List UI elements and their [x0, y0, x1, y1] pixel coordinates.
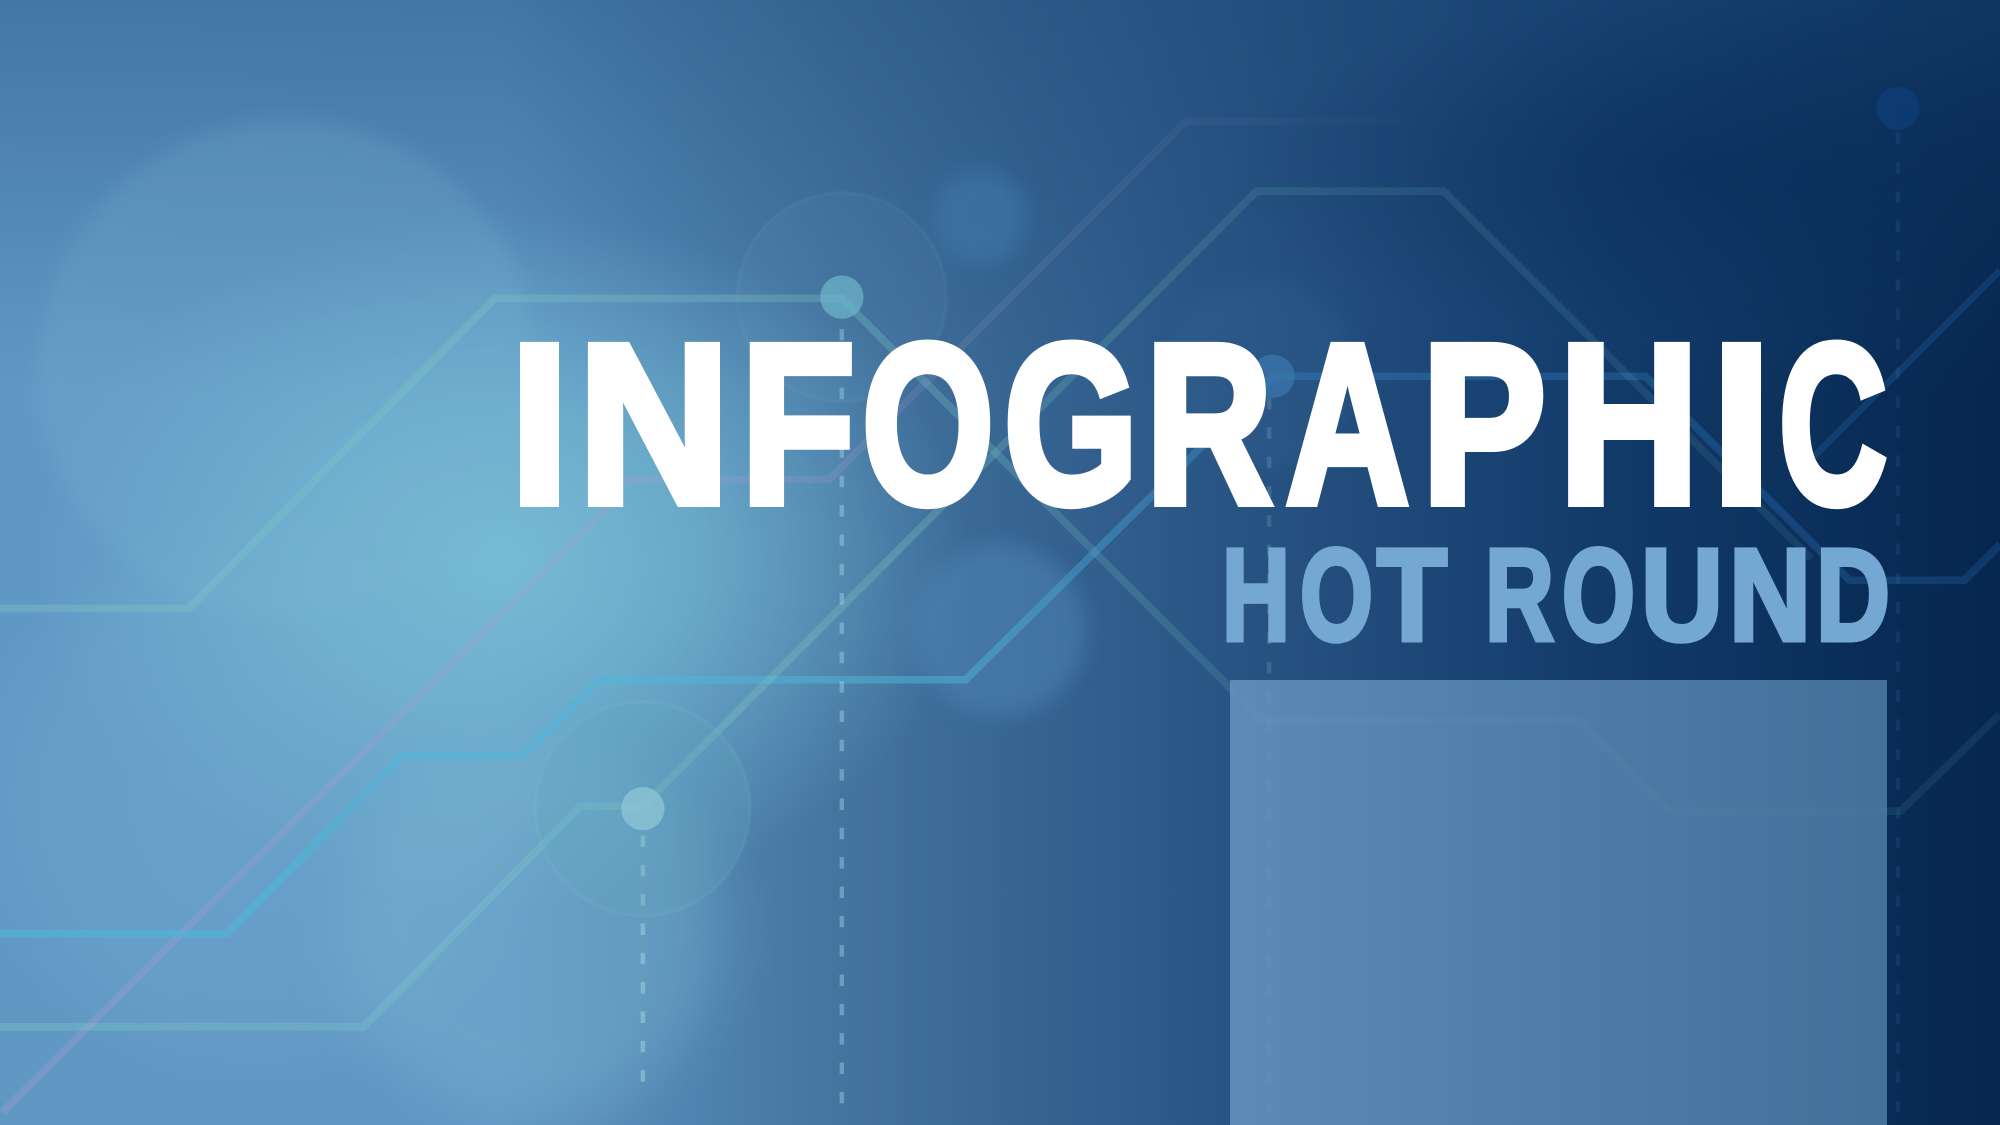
title: INFOGRAPHIC: N [578, 298, 730, 552]
line: lavender circuit [3, 121, 1416, 1112]
subtitle: HOT ROUND: N [1729, 521, 1811, 668]
title: INFOGRAPHIC: P [1422, 298, 1546, 552]
node dot: lower [621, 787, 665, 830]
subtitle: HOT ROUND: D [1816, 521, 1890, 668]
title: INFOGRAPHIC: I [1712, 298, 1771, 552]
title: INFOGRAPHIC: O [862, 298, 994, 552]
node dot: upper [820, 276, 864, 319]
node dot: top right [1876, 87, 1920, 130]
title: INFOGRAPHIC: A [1286, 298, 1409, 552]
title: INFOGRAPHIC: F [741, 298, 855, 552]
translucent content panel [1230, 680, 1887, 1125]
line: right blue diagonal [1811, 270, 2000, 459]
title: INFOGRAPHIC: G [1004, 298, 1138, 552]
subtitle: HOT ROUND: U [1641, 521, 1723, 668]
dashed vertical connectors [643, 133, 1898, 1122]
title: INFOGRAPHIC: C [1779, 298, 1887, 552]
lens ring: lower [536, 702, 750, 916]
subtitle: HOT ROUND: O [1562, 521, 1635, 668]
title: INFOGRAPHIC: H [1559, 298, 1699, 552]
subtitle: HOT ROUND: T [1377, 521, 1447, 668]
line: blue circuit [0, 376, 2000, 934]
title: INFOGRAPHIC: I [510, 298, 569, 552]
lens ring: upper [737, 193, 946, 402]
line: green-teal lower circuit [0, 191, 1811, 1027]
line: teal upper circuit [0, 298, 2000, 811]
subtitle: HOT ROUND: O [1300, 521, 1373, 668]
subtitle: HOT ROUND: H [1222, 521, 1290, 668]
title: INFOGRAPHIC: R [1146, 298, 1272, 552]
node dot: centre right [1251, 355, 1295, 398]
subtitle: HOT ROUND: R [1485, 521, 1554, 668]
